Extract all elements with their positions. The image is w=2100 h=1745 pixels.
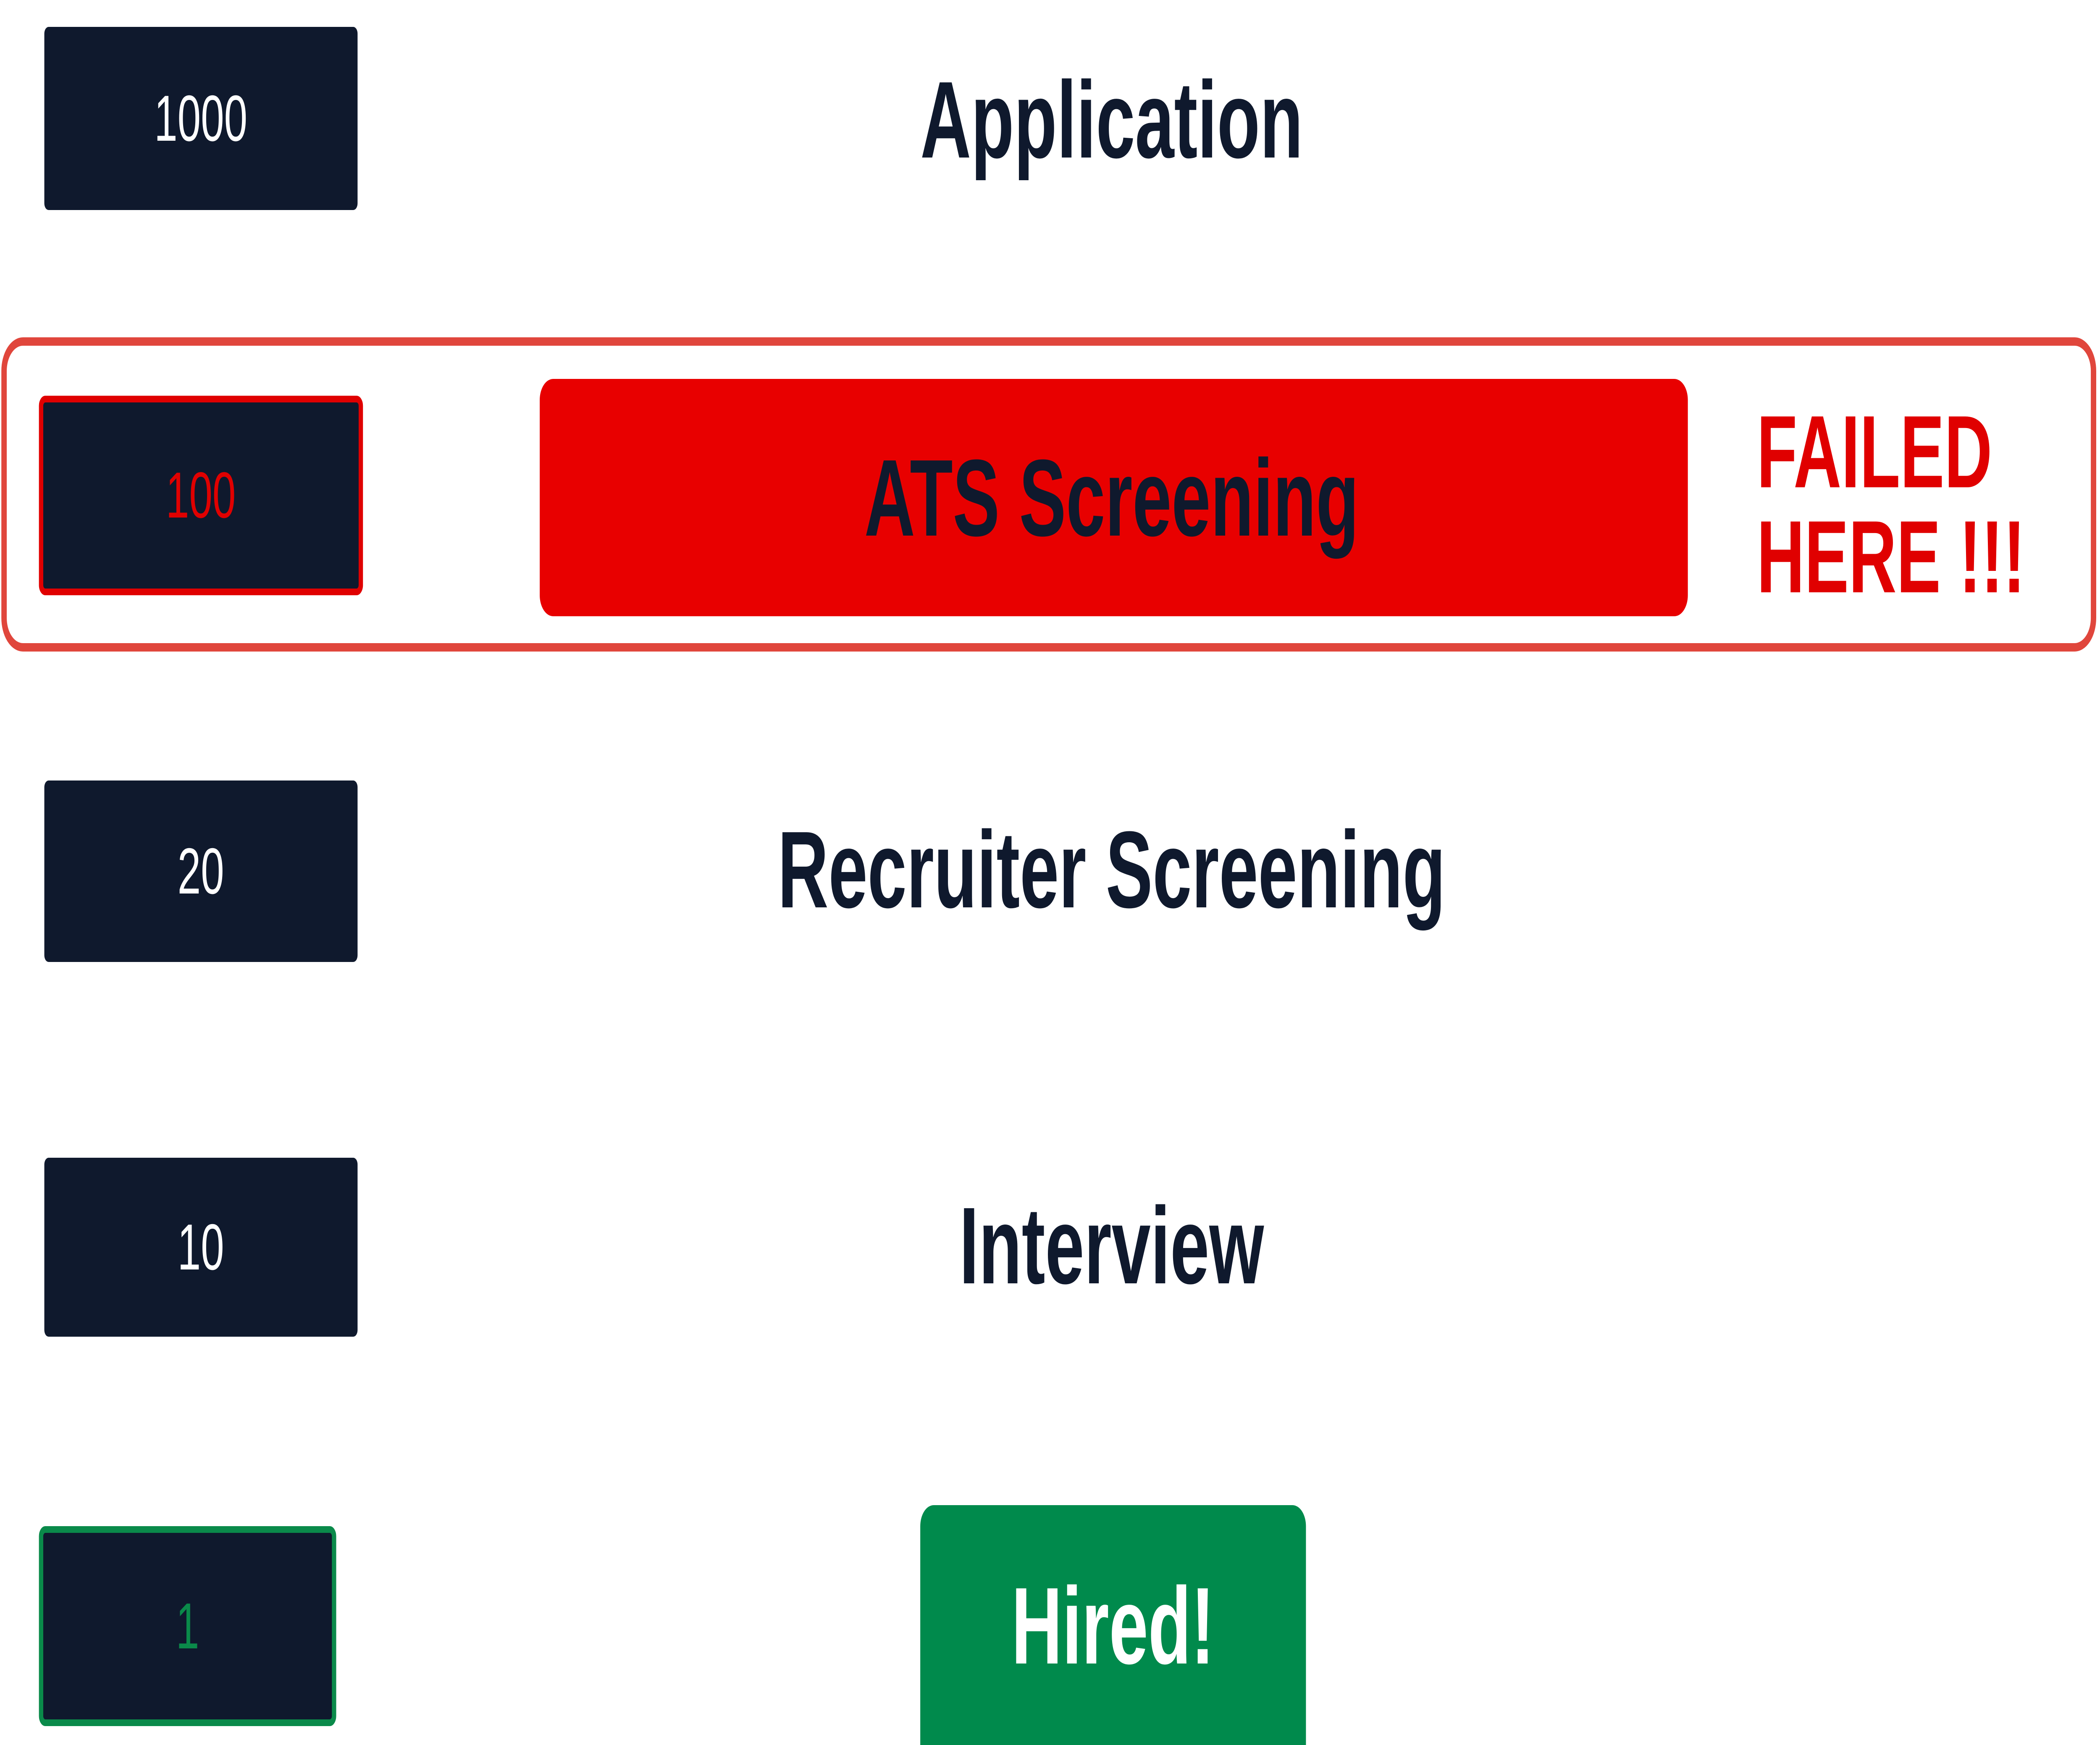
count box: 10: 10 bbox=[178, 1211, 224, 1283]
stage label: Recruiter Screening: Recruiter Screening bbox=[778, 809, 1446, 931]
count box: 100 bbox=[41, 399, 361, 592]
count box: 1000: 1000 bbox=[154, 82, 247, 155]
stage label: Interview: Interview bbox=[959, 1185, 1264, 1307]
panel: ATS screening failure highlight bbox=[4, 342, 2094, 647]
count box: 1 bbox=[41, 1530, 334, 1723]
count box: 20 bbox=[45, 781, 357, 962]
count box: 100: 100 bbox=[166, 459, 236, 531]
callout: FAILED HERE !!! bbox=[1757, 394, 2025, 614]
count box: 1: 1 bbox=[176, 1590, 199, 1662]
stage label: Application: Application bbox=[920, 59, 1303, 181]
count box: 1000 bbox=[45, 27, 357, 210]
stage box: Hired!: Hired! bbox=[1011, 1565, 1215, 1687]
stage bar: ATS Screening: ATS Screening bbox=[864, 437, 1359, 559]
callout: FAILED HERE !!!: FAILED bbox=[1757, 394, 1992, 509]
count box: 10 bbox=[45, 1158, 357, 1337]
callout: FAILED HERE !!!: HERE !!! bbox=[1757, 499, 2025, 614]
stage bar: ATS Screening bbox=[540, 379, 1688, 616]
stage box: Hired! bbox=[920, 1505, 1306, 1745]
count box: 20: 20 bbox=[178, 835, 224, 907]
